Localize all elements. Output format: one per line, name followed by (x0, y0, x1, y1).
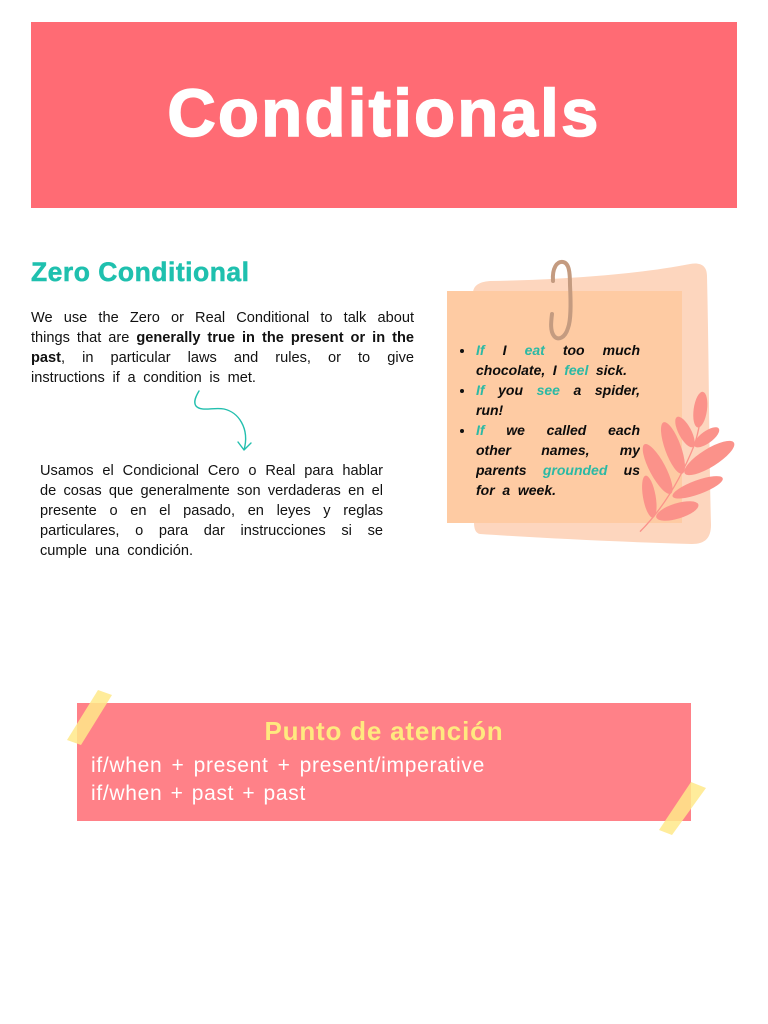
bullet 2 (460, 389, 464, 393)
text block: Spanish explanation: presente o en el pasado, en leyes y reglas (40, 503, 383, 519)
text block: English explanation: We use the Zero or Real Conditional to talk about (31, 310, 414, 326)
panel: sticky note front sheet (447, 291, 682, 523)
heading: punto de atención: Punto de atención (265, 716, 503, 746)
text block: Spanish explanation: particulares, o para dar instrucciones si se (40, 523, 383, 539)
text: parents grounded us (476, 462, 640, 478)
text: chocolate, I feel sick. (476, 362, 627, 378)
formula: past: if/when + past + past (91, 782, 306, 805)
bullet 1 (460, 349, 464, 353)
panel: punto de atención (77, 703, 691, 821)
text block: Spanish explanation (40, 463, 383, 559)
title banner (31, 22, 737, 208)
text: for a week. (476, 482, 556, 498)
text: If we called each (476, 422, 640, 438)
text: run! (476, 402, 503, 418)
heading: zero conditional: Zero Conditional (31, 257, 250, 287)
text block: Spanish explanation: de cosas que generalmente son verdaderas en el (40, 483, 383, 499)
text: If I eat too much (476, 342, 640, 358)
arrow: curved teal arrow (194, 390, 252, 451)
text block: Spanish explanation: Usamos el Condicional Cero o Real para hablar (40, 463, 383, 479)
formula: present: if/when + present + present/imperative (91, 754, 485, 777)
text: other names, my (476, 442, 640, 458)
text block: English explanation: things that are generally true in the present or in the (31, 330, 414, 346)
text block: example sentences list (460, 342, 640, 498)
text: If you see a spider, (476, 382, 640, 398)
text block: English explanation: instructions if a condition is met. (31, 370, 256, 386)
text block: English explanation: past, in particular laws and rules, or to give (31, 350, 414, 366)
bullet 3 (460, 429, 464, 433)
title: Conditionals (167, 76, 601, 151)
text block: English explanation (31, 310, 414, 386)
text block: Spanish explanation: cumple una condición. (40, 543, 193, 559)
